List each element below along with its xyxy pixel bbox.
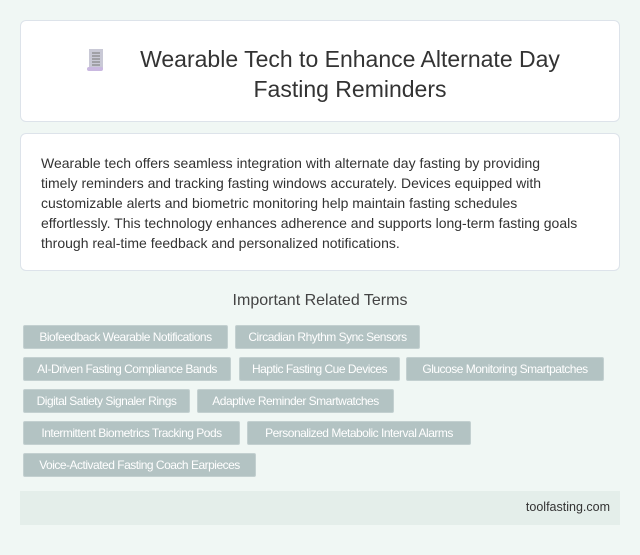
tag bbox=[23, 389, 190, 413]
tag bbox=[247, 421, 471, 445]
tag: Adaptive Reminder Smartwatches bbox=[212, 394, 379, 408]
title: Wearable Tech to Enhance Alternate Day bbox=[140, 46, 560, 72]
icon: document scroll bbox=[87, 49, 103, 71]
tag bbox=[23, 325, 228, 349]
section heading: Important Related Terms bbox=[233, 292, 407, 309]
tag bbox=[23, 421, 240, 445]
tag: Biofeedback Wearable Notifications bbox=[39, 330, 212, 344]
tag: Intermittent Biometrics Tracking Pods bbox=[41, 426, 222, 440]
tag: Glucose Monitoring Smartpatches bbox=[422, 362, 588, 376]
header card bbox=[20, 20, 620, 122]
tag: Circadian Rhythm Sync Sensors bbox=[248, 330, 407, 344]
tag: Personalized Metabolic Interval Alarms bbox=[265, 426, 453, 440]
footer bbox=[20, 491, 620, 525]
tag bbox=[23, 357, 231, 381]
title: Fasting Reminders bbox=[253, 76, 447, 102]
tag bbox=[23, 453, 256, 477]
footer text: toolfasting.com bbox=[526, 500, 610, 514]
title bbox=[140, 46, 560, 102]
tag: AI-Driven Fasting Compliance Bands bbox=[37, 362, 217, 376]
tag bbox=[406, 357, 604, 381]
tag: Digital Satiety Signaler Rings bbox=[37, 394, 176, 408]
tag bbox=[239, 357, 400, 381]
tag bbox=[197, 389, 394, 413]
tag: Voice-Activated Fasting Coach Earpieces bbox=[39, 458, 240, 472]
tag: Haptic Fasting Cue Devices bbox=[252, 362, 387, 376]
description card bbox=[20, 133, 620, 271]
tag bbox=[235, 325, 420, 349]
description text: Wearable tech offers seamless integration with alternate day fasting by providing timely reminders and tracking fasting windows accurately. Devices equipped with customizable alerts and biometric monitoring help maintain fasting schedules effortlessly. This technology enhances adherence and supports long-term fasting goals through real-time feedback and personalized notifications. bbox=[41, 155, 577, 251]
